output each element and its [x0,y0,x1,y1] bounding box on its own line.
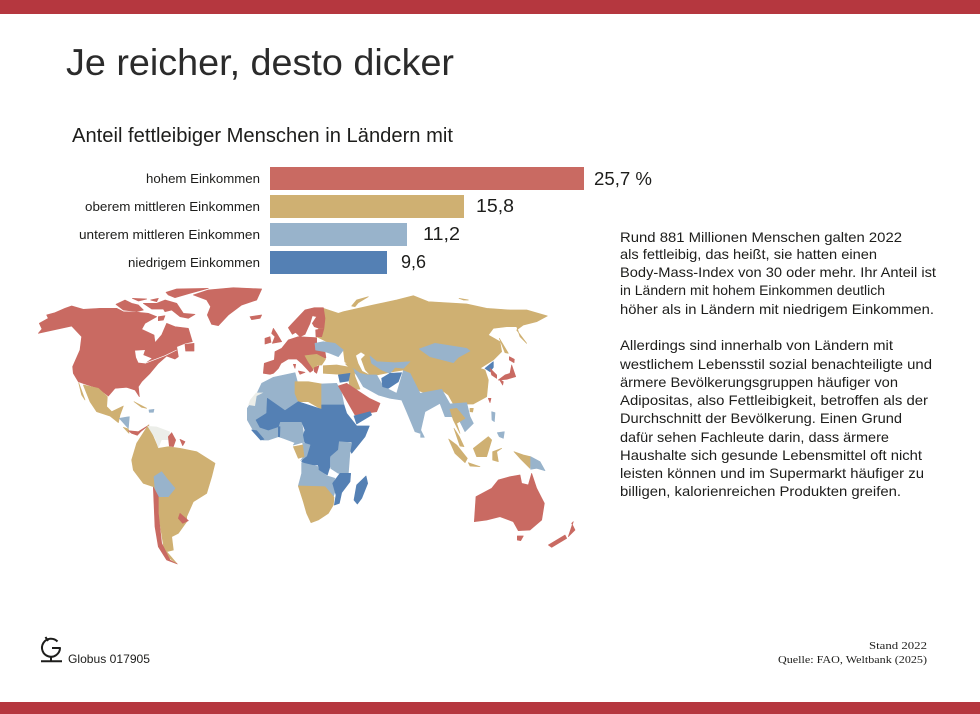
Africa and Arabia [247,373,380,523]
Europe and Turkey [263,308,369,390]
text block: paragraph 1 [620,229,936,317]
logo: Globus [41,637,62,661]
South America [132,425,215,564]
bar: oberem mittleren Einkommen: 15,8 [476,196,514,216]
Oceania [474,473,575,547]
bar: niedrigem Einkommen: niedrigem Einkommen [128,255,260,270]
bar: oberem mittleren Einkommen: oberem mittleren Einkommen [85,199,260,214]
text block: paragraph 2: dafür sehen Fachleute darin, dass ärmere [620,429,889,445]
source note [778,640,927,666]
bar: niedrigem Einkommen [128,251,426,274]
text block: paragraph 1: in Ländern mit hohem Einkommen deutlich [620,282,885,298]
text block: paragraph 1: höher als in Ländern mit niedrigem Einkommen. [620,301,934,317]
top band [0,0,980,14]
text block: paragraph 1: Rund 881 Millionen Menschen galten 2022 [620,229,902,245]
title: Je reicher, desto dicker [66,42,454,83]
credit: Globus 017905 [68,652,150,666]
bar: unterem mittleren Einkommen: 11,2 [423,224,460,244]
bar: hohem Einkommen [146,167,652,190]
Greenland [193,288,262,326]
world map [38,288,575,564]
bar: unterem mittleren Einkommen: unterem mittleren Einkommen [79,227,260,242]
bar chart [79,167,652,274]
bar: unterem mittleren Einkommen [79,223,460,246]
text block: paragraph 2: westlichem Lebensstil sozial benachteiligte und [619,356,932,372]
chart heading: Anteil fettleibiger Menschen in Ländern mit [72,125,453,147]
source note: Quelle: FAO, Weltbank (2025) [778,654,927,666]
text block: paragraph 2: Durchschnitt der Bevölkerung. Einen Grund [620,410,902,426]
North America [38,288,262,435]
text block: paragraph 2: Haushalte sich gesunde Lebensmittel oft nicht [620,447,922,463]
text block: paragraph 1: Body-Mass-Index von 30 oder mehr. Ihr Anteil ist [620,264,936,280]
text block: paragraph 2: ärmere Bevölkerungsgruppen häufiger von [620,374,898,390]
bar: oberem mittleren Einkommen [85,195,514,218]
Asia [317,296,547,471]
text block: paragraph 2 [619,337,932,499]
text block: paragraph 2: Adipositas, also Fettleibigkeit, betroffen als der [620,392,928,408]
text block: paragraph 1: als fettleibig, das heißt, sie hatten einen [620,246,877,262]
bar: hohem Einkommen: hohem Einkommen [146,171,260,186]
text block: paragraph 2: Allerdings sind innerhalb von Ländern mit [620,337,893,353]
text block: paragraph 2: leisten können und im Supermarkt häufiger zu [620,465,924,481]
source note: Stand 2022 [869,640,927,652]
Mexico [79,383,123,423]
bar: niedrigem Einkommen: 9,6 [401,252,426,272]
bar: hohem Einkommen: 25,7 % [594,169,652,189]
text block: paragraph 2: billigen, kalorienreichen Produkten greifen. [620,483,901,499]
bottom band [0,702,980,714]
